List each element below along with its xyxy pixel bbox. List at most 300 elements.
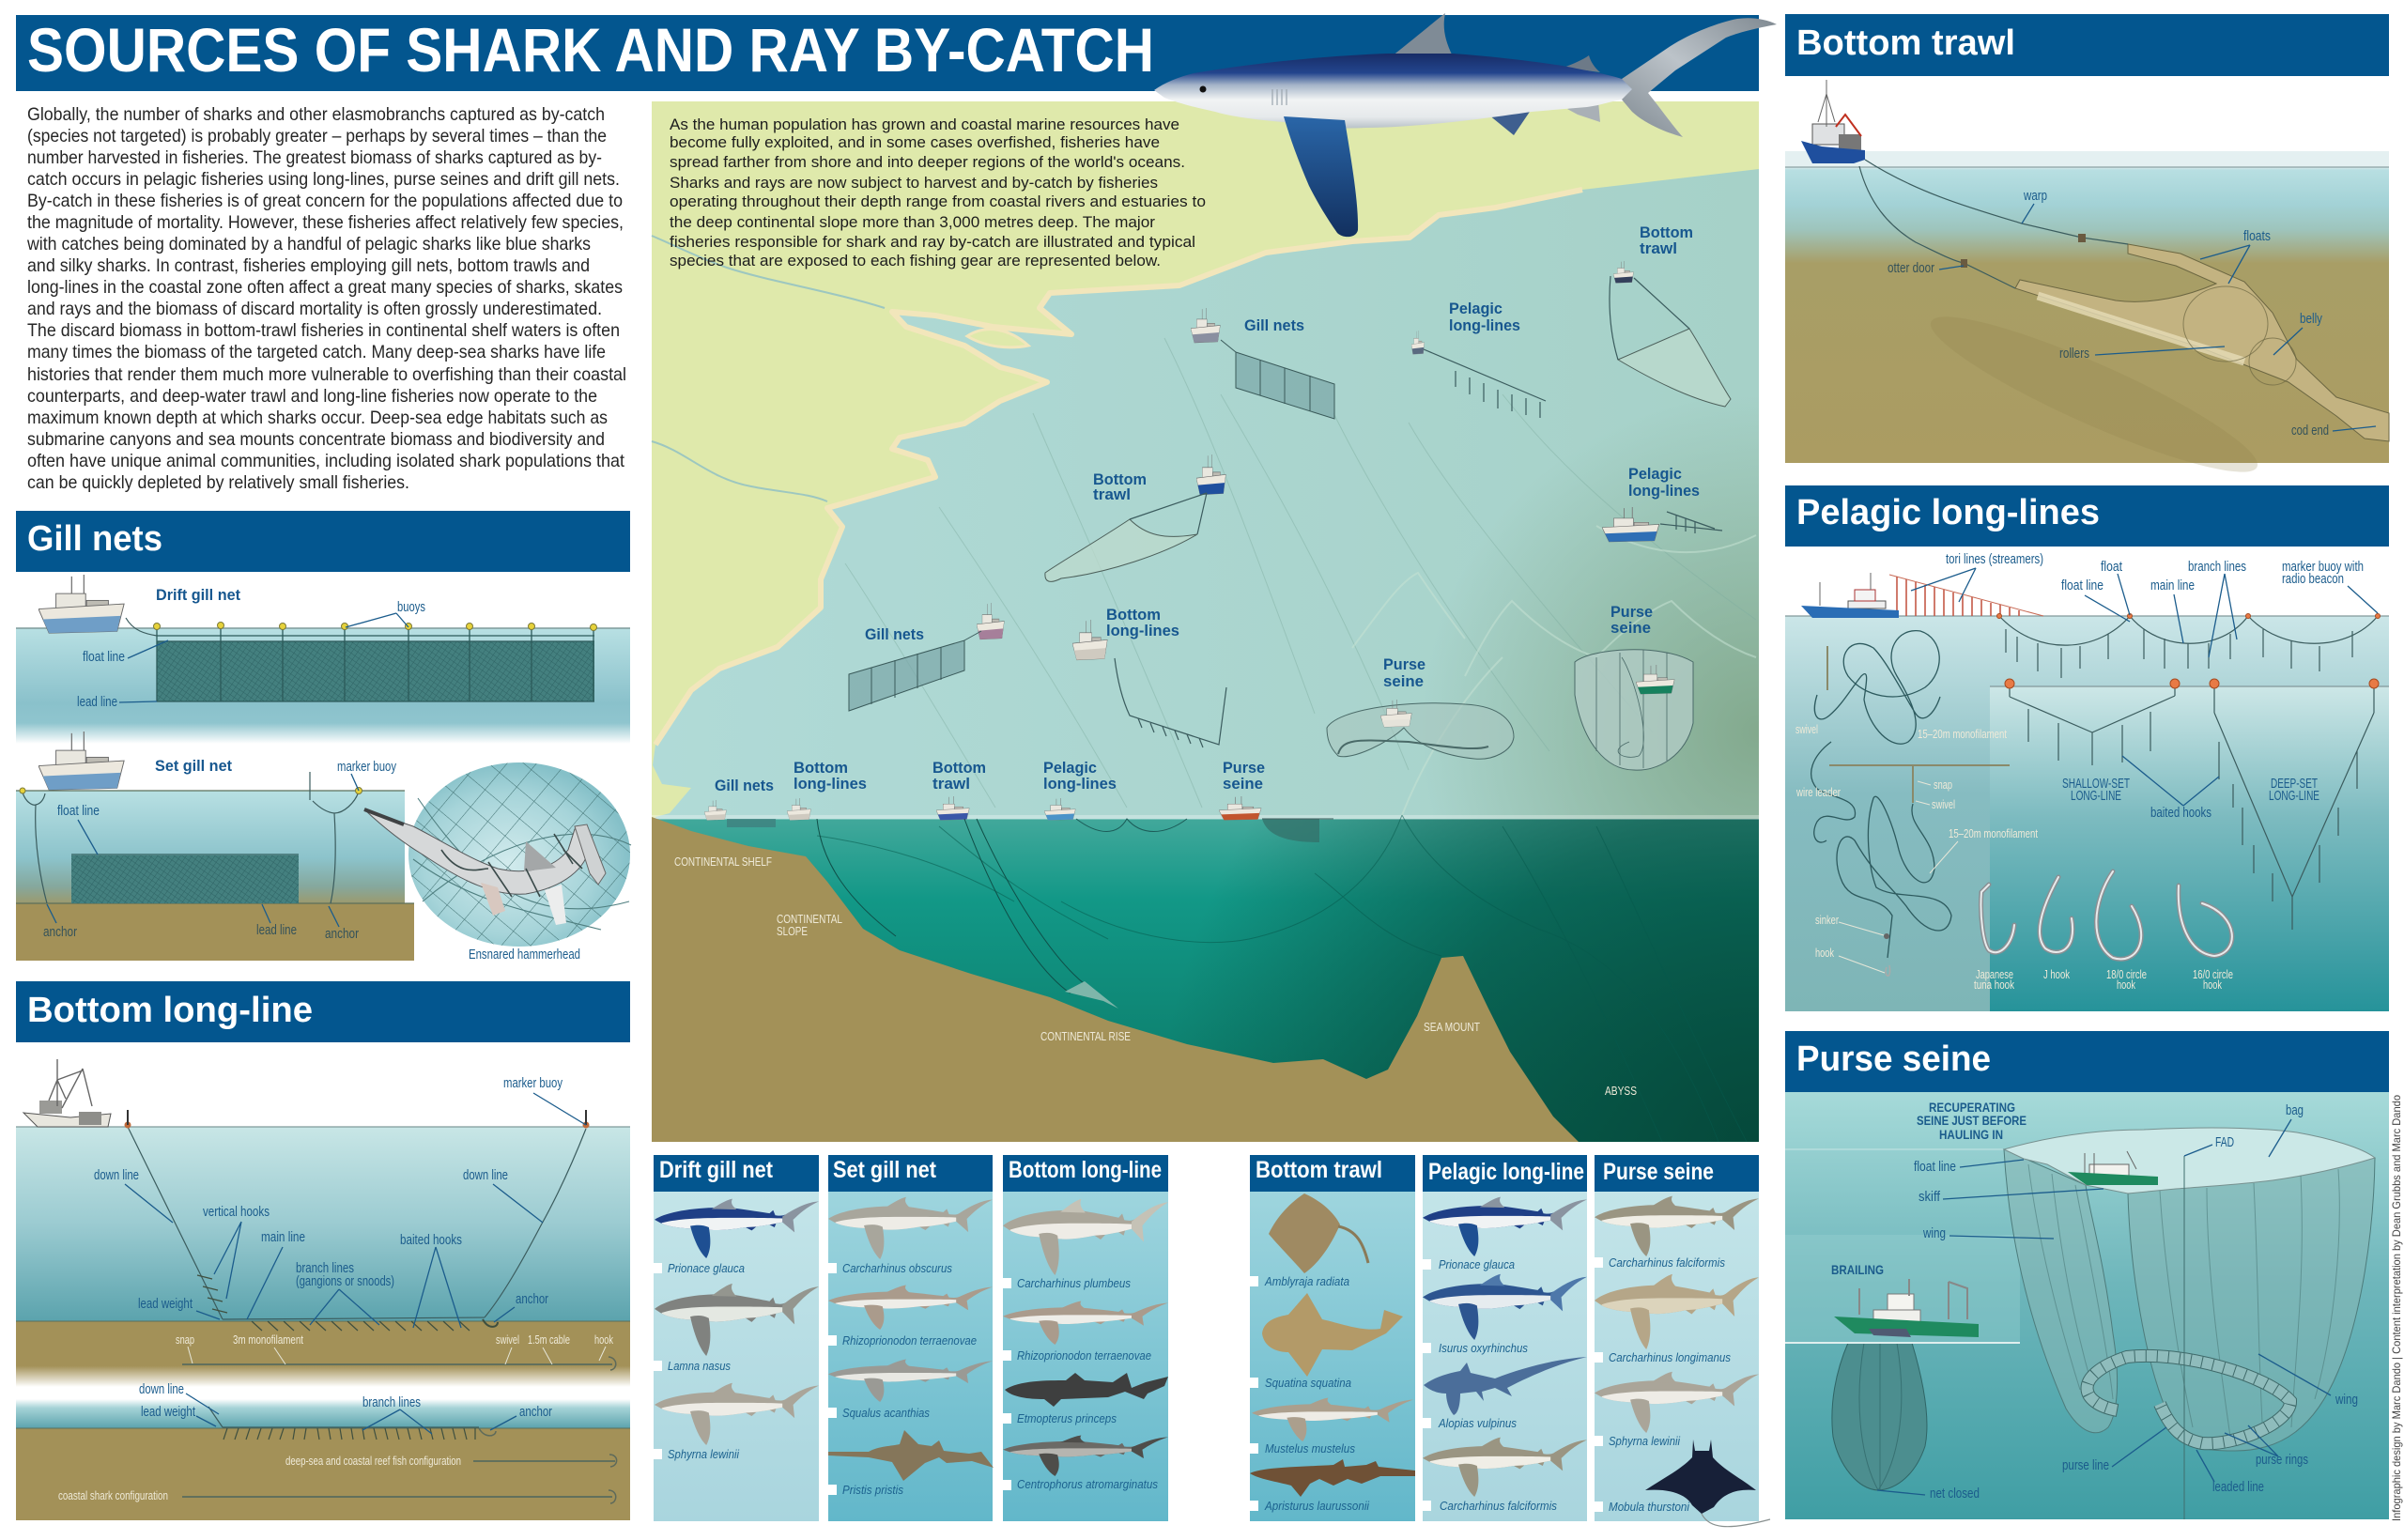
label: baited hooks: baited hooks xyxy=(400,1233,462,1248)
label: float line: float line xyxy=(57,804,100,819)
label: shallow-set long-line: SHALLOW-SET xyxy=(2062,777,2130,792)
labels: rig parts: sinker xyxy=(1815,914,1839,927)
label: anchor xyxy=(490,1405,552,1430)
species: Mustelus mustelus: Mustelus mustelus xyxy=(1265,1441,1355,1455)
label: floats: floats xyxy=(2243,229,2271,244)
rig labels: 1.5m cable xyxy=(528,1333,570,1347)
species: Pristis pristis: Pristis pristis xyxy=(842,1483,903,1497)
panel: species drift gill net xyxy=(654,1155,819,1521)
heading: bottom trawl xyxy=(1785,14,2389,76)
label: cod end xyxy=(2291,424,2376,439)
species: Carcharhinus longimanus: Carcharhinus longimanus xyxy=(1609,1350,1731,1364)
label: deep-set long-line: LONG-LINE xyxy=(2269,789,2319,804)
map gear: gill net mid xyxy=(849,603,1004,711)
title banner: SOURCES OF SHARK AND RAY BY-CATCH xyxy=(27,15,1154,85)
map gear: bottom trawl mid xyxy=(1045,454,1225,581)
map labels: fisheries: Bottom xyxy=(1640,223,1693,241)
label: baited hooks: baited hooks xyxy=(2150,806,2211,821)
map labels: fisheries: trawl xyxy=(932,775,970,793)
species: Sphyrna lewinii: Sphyrna lewinii xyxy=(668,1447,740,1461)
label: set gill net: Set gill net xyxy=(155,757,232,775)
label: purse rings: purse rings xyxy=(2256,1453,2308,1468)
label: marker buoy with radio beacon: radio beacon xyxy=(2282,572,2344,587)
intro text: map: spread farther from shore and into deeper regions of the world's oceans. xyxy=(670,153,1185,171)
map labels: fisheries: trawl xyxy=(1093,485,1131,503)
label: down line left xyxy=(94,1168,173,1223)
intro text: map: operating throughout their depth range from coastal rivers and estuaries to xyxy=(670,192,1206,210)
rig labels: snap xyxy=(176,1333,194,1347)
panel: central map xyxy=(652,101,1759,1142)
labels: hook types: J hook xyxy=(2043,968,2071,981)
panel: species purse seine xyxy=(1595,1155,1770,1527)
label: purse line xyxy=(2062,1427,2166,1473)
map labels: fisheries: Pelagic xyxy=(1628,465,1682,483)
species: Mustelus mustelus xyxy=(1250,1397,1413,1455)
label: anchor right xyxy=(325,906,359,942)
labels: hook types: 16/0 circle xyxy=(2193,968,2233,981)
label: float line xyxy=(1914,1160,2024,1175)
label: down line: down line xyxy=(139,1382,184,1397)
map gear: horizon boats and nets xyxy=(704,796,1333,1009)
intro text block: many times the biomass of the targeted catch. Many deep-sea sharks have life xyxy=(27,342,606,362)
map labels: fisheries: seine xyxy=(1610,619,1651,637)
label: belly: belly xyxy=(2300,312,2323,327)
sea surface shading xyxy=(1409,394,1759,819)
labels: hook types: Japanese xyxy=(1976,968,2013,981)
intro text block: (species not targeted) is probably greater – perhaps by several times – than the xyxy=(27,126,607,146)
label: anchor right: anchor xyxy=(325,927,359,942)
rivers and seabed ridges xyxy=(652,236,1756,815)
label: branch lines: branch lines xyxy=(362,1395,421,1410)
species: Rhizoprionodon terraenovae: Rhizoprionodon terraenovae xyxy=(842,1333,977,1348)
label: tori lines xyxy=(1911,552,2043,602)
map labels: terrain xyxy=(674,855,1637,1098)
map gear: purse seine mid xyxy=(1327,700,1514,759)
icon: recuperating seiner xyxy=(2068,1151,2158,1185)
label: marker buoy xyxy=(337,760,397,791)
icons: metal hooks xyxy=(1980,871,2232,959)
labels: hook types: 18/0 circle xyxy=(2106,968,2147,981)
heading: bottom long-line: Bottom long-line xyxy=(27,991,313,1030)
species: Carcharhinus falciformis: Carcharhinus falciformis xyxy=(1609,1255,1725,1270)
label: marker buoy with radio beacon: marker buoy with xyxy=(2282,560,2364,575)
labels: rig parts: 15–20m monofilament xyxy=(1949,827,2038,840)
label: net closed xyxy=(1877,1486,1980,1502)
labels: hook types: tuna hook xyxy=(1974,978,2015,992)
panel: species bottom trawl xyxy=(1250,1155,1415,1521)
intro text block: submarine canyons and sea mounts concentrate biomass and biodiversity and xyxy=(27,429,605,450)
map labels: fisheries: Bottom xyxy=(1106,606,1161,624)
label: buoys xyxy=(346,600,425,627)
map labels: fisheries xyxy=(715,223,1700,794)
intro text block: Globally, the number of sharks and other elasmobranchs captured as by-catch xyxy=(27,104,605,125)
species: Carcharhinus obscurus: Carcharhinus obscurus xyxy=(842,1261,952,1275)
species: Prionace glauca xyxy=(1423,1197,1587,1271)
label: leaded line xyxy=(2196,1450,2264,1495)
intro text block: counterparts, and deep-water trawl and long-line fisheries now operate to the xyxy=(27,386,597,407)
inset: ensnared hammerhead xyxy=(364,762,631,962)
labels: hook types: hook xyxy=(2117,978,2136,992)
label: float line xyxy=(2061,578,2130,622)
heading xyxy=(654,1155,819,1192)
label: deep-set long-line xyxy=(2269,777,2319,804)
label: branch lines: (gangions or snoods) xyxy=(296,1274,394,1289)
label: ensnared hammerhead: Ensnared hammerhead xyxy=(469,947,580,962)
label: down line right xyxy=(463,1168,543,1223)
species: Rhizoprionodon terraenovae xyxy=(828,1286,993,1348)
species: Carcharhinus plumbeus xyxy=(1003,1199,1168,1290)
heading: Drift gill net xyxy=(659,1157,774,1183)
species: Carcharhinus falciformis: Carcharhinus falciformis xyxy=(1440,1499,1557,1513)
intro text block: with catches being dominated by a handful of pelagic sharks like blue sharks xyxy=(26,234,591,254)
label: purse rings xyxy=(2225,1425,2308,1468)
species: Alopias vulpinus: Alopias vulpinus xyxy=(1438,1416,1517,1430)
intro text: map: Sharks and rays are now subject to harvest and by-catch by fisheries xyxy=(670,174,1158,192)
species: Carcharhinus falciformis xyxy=(1423,1438,1587,1513)
labels: rig parts: hook xyxy=(1815,947,1835,960)
icon: brailing boat xyxy=(1834,1279,1979,1337)
label: skiff xyxy=(1919,1189,2104,1205)
label: anchor left xyxy=(43,904,77,940)
label: leaded line: leaded line xyxy=(2212,1480,2264,1495)
label: bag: bag xyxy=(2286,1103,2304,1118)
labels: rig parts: 15–20m monofilament xyxy=(1918,728,2007,741)
label: baited hooks xyxy=(2122,756,2219,821)
label: wing left: wing xyxy=(1922,1226,1946,1241)
label: anchor left: anchor xyxy=(43,925,77,940)
map labels: fisheries: Purse xyxy=(1383,655,1425,673)
rig labels: hook xyxy=(594,1333,614,1347)
heading: Bottom long-line xyxy=(1009,1157,1162,1183)
label: FAD: FAD xyxy=(2215,1135,2234,1150)
map labels: terrain: CONTINENTAL SHELF xyxy=(674,855,772,869)
diagram: drift gill net xyxy=(16,575,630,744)
panel: bottom trawl xyxy=(1785,14,2389,495)
intro text: map: become fully exploited, and in some cases overfished, fisheries have xyxy=(670,133,1160,151)
map labels: terrain: ABYSS xyxy=(1605,1085,1637,1098)
label: lead line xyxy=(77,695,157,710)
map labels: fisheries: Gill nets xyxy=(715,777,774,794)
species: Squatina squatina: Squatina squatina xyxy=(1265,1376,1351,1390)
label: float line xyxy=(57,804,100,855)
label: marker buoy with radio beacon xyxy=(2282,560,2378,613)
underwater ridges xyxy=(817,815,1747,1142)
label: tori lines: tori lines (streamers) xyxy=(1946,552,2043,567)
label: down line right: down line xyxy=(463,1168,508,1183)
map gear: pelagic right xyxy=(1602,507,1722,542)
labels: rig parts: swivel xyxy=(1932,798,1955,811)
labels: rig parts: snap xyxy=(1934,778,1952,792)
title banner xyxy=(16,15,1759,91)
map labels: fisheries: long-lines xyxy=(1106,622,1179,639)
coastline beach xyxy=(655,190,1582,745)
label: branch lines xyxy=(2188,560,2246,657)
label: cod end: cod end xyxy=(2291,424,2329,439)
label: deep-sea configuration: deep-sea and coastal reef fish configuration xyxy=(285,1455,461,1468)
map labels: fisheries: seine xyxy=(1223,775,1263,793)
sea surface xyxy=(653,169,1759,819)
label: lead weight: lead weight xyxy=(138,1297,193,1312)
label: anchor: anchor xyxy=(516,1292,548,1307)
underwater section xyxy=(652,819,1759,1142)
label: FAD xyxy=(2184,1135,2234,1156)
icon: trawler xyxy=(1801,80,1865,163)
label: float: float xyxy=(2101,560,2122,575)
panel: bottom long-line xyxy=(16,981,630,1520)
species: Centrophorus atromarginatus: Centrophorus atromarginatus xyxy=(1017,1477,1158,1491)
labels: hook types xyxy=(1974,968,2233,992)
species: Carcharhinus obscurus xyxy=(828,1197,993,1275)
species: Rhizoprionodon terraenovae xyxy=(1003,1301,1168,1363)
label: anchor: anchor xyxy=(519,1405,552,1420)
species: Sphyrna lewinii: Sphyrna lewinii xyxy=(1609,1434,1681,1448)
heading xyxy=(828,1155,993,1192)
diagram: set gill net xyxy=(16,732,414,961)
species: Alopias vulpinus xyxy=(1423,1357,1587,1430)
heading: pelagic long-lines: Pelagic long-lines xyxy=(1796,493,2100,532)
label: down line xyxy=(139,1382,219,1414)
panel: gill nets xyxy=(16,511,631,962)
label: bag xyxy=(2269,1103,2304,1157)
species: Prionace glauca xyxy=(654,1199,819,1275)
credit line: Infographic design by Marc Dando | Content interpretation by Dean Grubbs and Marc Dando xyxy=(2390,1095,2403,1521)
intro text block: can be quickly depleted by relatively small fisheries. xyxy=(27,472,409,493)
heading: pelagic long-lines xyxy=(1785,485,2389,547)
label: purse line: purse line xyxy=(2062,1458,2109,1473)
island xyxy=(967,330,1028,347)
map labels: fisheries: long-lines xyxy=(794,775,867,793)
heading: gill nets xyxy=(16,511,630,572)
intro text block: number harvested in fisheries. The greatest biomass of sharks captured as by- xyxy=(27,147,602,168)
species: Carcharhinus longimanus xyxy=(1595,1274,1759,1364)
species: Rhizoprionodon terraenovae: Rhizoprionodon terraenovae xyxy=(1017,1348,1151,1363)
land xyxy=(652,101,1759,819)
label: marker buoy xyxy=(503,1076,586,1125)
heading: purse seine xyxy=(1785,1031,2389,1092)
heading xyxy=(1595,1155,1759,1192)
panel: species pelagic long-line xyxy=(1423,1155,1587,1521)
map labels: fisheries: Bottom xyxy=(932,759,986,777)
species: Carcharhinus falciformis xyxy=(1595,1196,1759,1270)
label: branch lines: branch lines xyxy=(296,1261,354,1276)
map gear: pelagic line upper xyxy=(1411,331,1546,418)
map labels: fisheries: Pelagic xyxy=(1043,759,1097,777)
intro text block: histories that render them much more vulnerable to overfishing than their coastal xyxy=(27,364,626,385)
label: net closed: net closed xyxy=(1930,1486,1980,1502)
label: lead line: lead line xyxy=(77,695,117,710)
panel: pelagic long-lines xyxy=(1785,485,2389,1011)
label: warp: warp xyxy=(2023,189,2047,204)
intro text: map: the deep continental slope more than 3,000 metres deep. The major xyxy=(670,213,1155,231)
brailing water box xyxy=(1785,1235,2020,1343)
species: Lamna nasus xyxy=(654,1284,819,1373)
rig labels xyxy=(176,1333,614,1364)
label: float line: float line xyxy=(1914,1160,1956,1175)
labels: rig parts: wire leader xyxy=(1795,786,1841,799)
label: lead weight xyxy=(141,1405,216,1426)
panel: purse seine xyxy=(1785,1031,2389,1519)
map labels: fisheries: Bottom xyxy=(794,759,848,777)
heading: bottom trawl: Bottom trawl xyxy=(1796,23,2015,63)
diagram: purse seine scene xyxy=(1785,1092,2389,1519)
species: Mobula thurstoni: Mobula thurstoni xyxy=(1609,1500,1690,1514)
heading xyxy=(1423,1155,1587,1192)
intro text block: often have unique animal communities, including isolated shark populations that xyxy=(27,451,625,471)
panel: species bottom long-line xyxy=(1003,1155,1168,1521)
species: Lamna nasus: Lamna nasus xyxy=(668,1359,731,1373)
intro text: map: As the human population has grown and coastal marine resources have xyxy=(670,116,1179,133)
label: lead weight: lead weight xyxy=(141,1405,195,1420)
label: float xyxy=(2101,560,2130,615)
map labels: fisheries: Purse xyxy=(1610,603,1653,621)
diagram: pelagic scene xyxy=(1785,552,2389,1011)
map labels: fisheries: long-lines xyxy=(1449,316,1520,334)
label: skiff: skiff xyxy=(1919,1190,1941,1205)
label: floats xyxy=(2200,229,2271,284)
intro text: map xyxy=(670,116,1206,270)
purse ring band xyxy=(2087,1356,2290,1443)
species: Squatina squatina xyxy=(1250,1293,1403,1390)
label: down line left: down line xyxy=(94,1168,139,1183)
species: Prionace glauca: Prionace glauca xyxy=(1439,1257,1515,1271)
label: vertical hooks xyxy=(203,1205,270,1299)
intro text block: long-lines in the coastal zone often affect a great many species of sharks, skates xyxy=(27,277,623,298)
intro text block: The discard biomass in bottom-trawl fisheries in continental shelf waters is often xyxy=(27,320,620,341)
map gear: purse seine right xyxy=(1575,650,1693,770)
icon: long-line boat xyxy=(23,1059,111,1127)
labels: hook types: hook xyxy=(2203,978,2223,992)
map gear: bottom trawl top right xyxy=(1610,261,1731,407)
main seine net xyxy=(2004,1149,2118,1433)
intro text block: maximum known depth at which sharks occur. Deep-sea edge habitats such as xyxy=(27,408,608,428)
map labels: fisheries: Gill nets xyxy=(865,625,924,643)
map labels: fisheries: trawl xyxy=(1640,239,1677,257)
label: branch lines xyxy=(362,1395,432,1434)
illustration: blue shark xyxy=(1154,13,1777,237)
panel: species set gill net xyxy=(828,1155,994,1521)
diagram: upper long-line xyxy=(16,1059,630,1387)
heading: purse seine: Purse seine xyxy=(1796,1040,1991,1079)
closed net xyxy=(1832,1343,1927,1490)
species: Squalus acanthias xyxy=(828,1359,993,1420)
map labels: terrain: CONTINENTAL xyxy=(777,913,842,926)
label: recuperating seine xyxy=(1917,1100,2026,1142)
heading: bottom long-line xyxy=(16,981,630,1042)
icon: set boat xyxy=(39,732,124,790)
heading: Purse seine xyxy=(1603,1159,1714,1185)
label: anchor xyxy=(494,1292,548,1322)
species: Carcharhinus plumbeus: Carcharhinus plumbeus xyxy=(1017,1276,1131,1290)
label: vertical hooks: vertical hooks xyxy=(203,1205,270,1220)
label: rollers: rollers xyxy=(2059,346,2089,362)
label: buoys: buoys xyxy=(397,600,425,615)
map labels: fisheries: long-lines xyxy=(1628,482,1700,500)
label: main line: main line xyxy=(261,1230,305,1245)
map labels: terrain: SLOPE xyxy=(777,925,808,938)
rig labels: swivel xyxy=(496,1333,519,1347)
label: lead weight xyxy=(138,1297,220,1319)
heading: Bottom trawl xyxy=(1256,1157,1382,1183)
label: main line xyxy=(2150,578,2195,643)
map labels: fisheries: Pelagic xyxy=(1449,300,1502,317)
label: deep-set long-line: DEEP-SET xyxy=(2271,777,2318,792)
label: main line: main line xyxy=(2150,578,2195,593)
label: branch lines: branch lines xyxy=(2188,560,2246,575)
label: belly xyxy=(2273,312,2323,355)
icon: longliner xyxy=(1801,573,1899,618)
seabed profile xyxy=(652,817,1579,1142)
species: Prionace glauca: Prionace glauca xyxy=(668,1261,745,1275)
intro text: map: fisheries responsible for shark and ray by-catch are illustrated and typical xyxy=(670,233,1195,251)
label: float line: float line xyxy=(2061,578,2104,593)
diagram: trawl scene xyxy=(1785,80,2389,495)
label: lead line: lead line xyxy=(256,923,297,938)
map labels: fisheries: Purse xyxy=(1223,759,1265,777)
species: Amblyraja radiata: Amblyraja radiata xyxy=(1264,1274,1349,1288)
species: Apristurus laurussonii: Apristurus laurussonii xyxy=(1264,1499,1370,1513)
label: drift gill net: Drift gill net xyxy=(156,586,240,604)
species: Sphyrna lewinii xyxy=(1595,1372,1759,1448)
label: baited hooks xyxy=(400,1233,462,1328)
species: Centrophorus atromarginatus xyxy=(1003,1435,1168,1491)
intro text block: and rays and the biomass of discard mortality is often grossly underestimated. xyxy=(27,299,602,319)
map gear: bottom long-lines xyxy=(1072,620,1226,747)
species: Apristurus laurussonii xyxy=(1250,1459,1415,1513)
species: Pristis pristis xyxy=(828,1430,994,1497)
label: warp xyxy=(2022,189,2047,223)
intro text block: the magnitude of mortality. However, these fisheries affect relatively few species, xyxy=(27,212,624,233)
label: marker buoy: marker buoy xyxy=(337,760,397,775)
map labels: fisheries: seine xyxy=(1383,672,1424,690)
heading xyxy=(1250,1155,1415,1192)
label: marker buoy: marker buoy xyxy=(503,1076,563,1091)
species: Etmopterus princeps: Etmopterus princeps xyxy=(1017,1411,1117,1425)
species: Isurus oxyrhinchus: Isurus oxyrhinchus xyxy=(1439,1341,1528,1355)
species: Squalus acanthias: Squalus acanthias xyxy=(842,1406,930,1420)
intro text block: and silky sharks. In contrast, fisheries employing gill nets, bottom trawls and xyxy=(27,255,590,276)
map labels: terrain: CONTINENTAL RISE xyxy=(1040,1030,1131,1043)
tangled monofilament lines xyxy=(1811,631,1951,958)
label: main line xyxy=(247,1230,305,1319)
label: recuperating seine: RECUPERATING xyxy=(1929,1100,2015,1115)
label: rollers xyxy=(2059,346,2225,362)
label: lead line xyxy=(256,904,297,938)
label: wing right: wing xyxy=(2335,1393,2358,1408)
species: Etmopterus princeps xyxy=(1003,1373,1168,1425)
map labels: terrain: SEA MOUNT xyxy=(1424,1021,1480,1034)
labels: rig parts: swivel xyxy=(1795,723,1818,736)
species: Sphyrna lewinii xyxy=(654,1383,819,1461)
map labels: fisheries: Gill nets xyxy=(1244,316,1304,334)
label: recuperating seine: SEINE JUST BEFORE xyxy=(1917,1113,2026,1128)
map gear: gill net upper xyxy=(1191,308,1334,419)
label: branch lines xyxy=(296,1261,394,1325)
heading: Set gill net xyxy=(833,1157,937,1183)
label: shallow-set long-line xyxy=(2062,777,2130,804)
label: float line xyxy=(83,640,168,665)
map labels: fisheries: long-lines xyxy=(1043,775,1117,793)
intro text block xyxy=(26,104,626,493)
icon: drift boat xyxy=(39,575,124,633)
heading: Pelagic long-line xyxy=(1428,1159,1584,1185)
rig labels: 3m monofilament xyxy=(233,1333,303,1347)
species: Mobula thurstoni xyxy=(1595,1440,1770,1527)
label: shallow-set long-line: LONG-LINE xyxy=(2071,789,2121,804)
heading xyxy=(1003,1155,1168,1192)
diagram: lower long-line xyxy=(16,1382,630,1520)
label: float line: float line xyxy=(83,650,125,665)
label: wing right xyxy=(2258,1354,2358,1408)
